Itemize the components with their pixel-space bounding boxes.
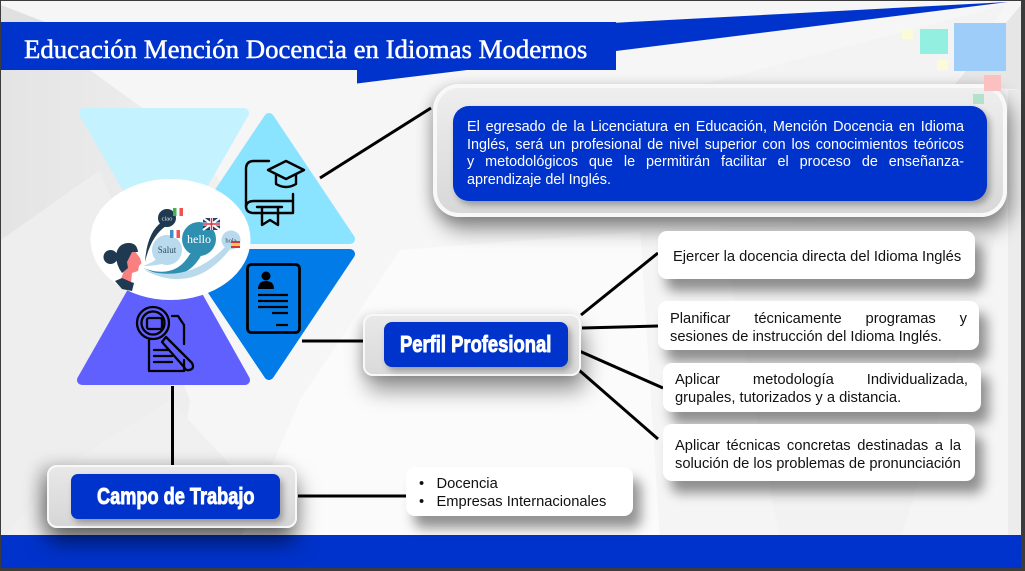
flag: Italy [173,208,183,216]
card: work fields list: Docencia [436,476,498,492]
card: técnicas de pronunciación: Aplicar técnicas concretas destinadas a la [675,438,961,454]
card: planificar: sesiones de instrucción del Idioma Inglés. [670,328,942,344]
bubble: ciao [158,209,176,227]
bubble: hello [182,222,216,256]
heading: Perfil Profesional [384,322,568,367]
heading: Perfil Profesional: Perfil Profesional [400,331,551,357]
description text box: El egresado de la Licenciatura en Educación, Mención Docencia en Idioma [467,119,964,135]
panel: graduate description [433,84,1007,217]
flag: United Kingdom [203,218,220,230]
panel: Perfil Profesional [363,314,581,376]
triangle: purple with search icon [82,236,245,380]
triangle: blue with resume icon [188,254,350,375]
icon: magnifier over document [137,307,193,371]
triangle: light cyan [84,113,244,252]
hexagon of triangles [77,108,355,385]
description text box [453,106,987,201]
card: work fields list: • [419,494,424,510]
card: docencia directa [658,231,975,279]
card: planificar [658,301,979,350]
bubble: hola [222,230,240,250]
panel: Campo de Trabajo [47,465,297,528]
card: work fields list: • [419,476,424,492]
woman profile [104,243,142,291]
bubble: Salut: Salut [158,245,177,255]
card: work fields list [406,467,633,516]
card: planificar: Planificar técnicamente programas y [670,310,967,326]
description text box: y metodológicos que le permitirán facilitar el proceso de enseñanza- [467,154,964,170]
icon: resume document [248,264,300,332]
heading: Campo de Trabajo: Campo de Trabajo [97,483,255,509]
icon: graduation book [246,161,304,225]
triangle: cyan with book icon [188,118,350,239]
card: metodología: grupales, tutorizados y a distancia. [675,390,901,406]
bubble: Salut [152,235,182,265]
bubble: hola: hola [225,238,237,244]
card: docencia directa: Ejercer la docencia directa del Idioma Inglés [673,249,961,265]
flag: France [170,230,180,238]
decorative squares [902,23,1006,104]
bubble: hello: hello [187,232,211,246]
bubble: ciao: ciao [162,216,172,222]
title ribbon [1,2,1008,84]
description text box: Inglés, será un profesional de nivel superior con los conocimientos teóricos [467,137,964,153]
bubble tails [143,222,231,279]
title: Educación Mención Docencia en Idiomas Modernos [24,34,587,64]
card: metodología [663,363,981,412]
flag: Spain [231,241,240,248]
card: metodología: Aplicar metodología Individualizada, [675,372,968,388]
heading: Campo de Trabajo [71,474,280,519]
description text box: aprendizaje del Inglés. [467,172,611,188]
bottom band [1,535,1021,568]
card: work fields list: Empresas Internacionales [436,494,606,510]
speech illustration oval [90,179,250,300]
card: técnicas de pronunciación: solución de los problemas de pronunciación [675,456,961,472]
card: técnicas de pronunciación [663,424,975,481]
